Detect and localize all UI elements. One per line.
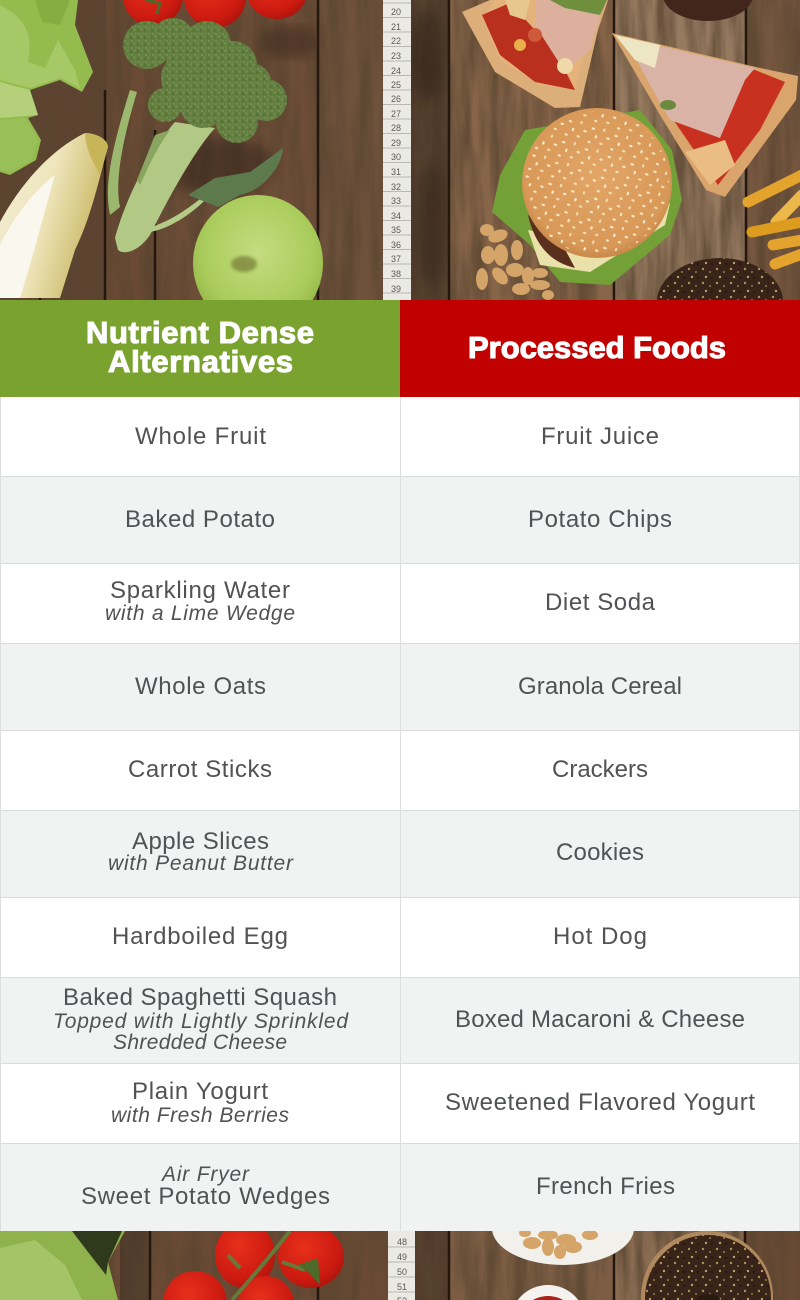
pizza slice, right bbox=[612, 33, 798, 197]
row 9: Plain Yogurt / Sweetened Flavored Yogurt: with Fresh Berries bbox=[111, 1104, 290, 1127]
row 8: Baked Spaghetti Squash / Boxed Macaroni & Cheese: Shredded Cheese bbox=[113, 1031, 287, 1054]
row 1: Whole Fruit / Fruit Juice bbox=[135, 423, 659, 450]
row 7: Hardboiled Egg / Hot Dog: Hot Dog bbox=[553, 923, 647, 950]
row 1: Whole Fruit / Fruit Juice: Fruit Juice bbox=[541, 423, 659, 450]
row 2: Baked Potato / Potato Chips: Potato Chips bbox=[528, 506, 672, 533]
measuring tape, top: 39 bbox=[391, 284, 401, 294]
measuring tape, top: 22 bbox=[391, 36, 401, 46]
row 8: Baked Spaghetti Squash / Boxed Macaroni & Cheese: Boxed Macaroni & Cheese bbox=[455, 1006, 745, 1033]
header: Processed Foods bbox=[400, 300, 800, 397]
measuring tape, bottom: 49 bbox=[397, 1252, 407, 1262]
tomatoes on the vine bbox=[163, 1231, 344, 1300]
row 3: Sparkling Water / Diet Soda: with a Lime Wedge bbox=[105, 602, 295, 625]
row 3: Sparkling Water / Diet Soda: Sparkling Water bbox=[110, 577, 290, 604]
pizza slice, left bbox=[462, 0, 608, 108]
row 6: Apple Slices / Cookies: Apple Slices bbox=[132, 828, 269, 855]
wood planks, bottom bbox=[108, 1231, 800, 1300]
endive bbox=[0, 133, 108, 298]
lettuce bbox=[0, 0, 93, 175]
header: Processed Foods: Processed Foods bbox=[468, 330, 726, 365]
bottom photo: tomatoes, peanuts, donut on wood bbox=[0, 1231, 800, 1300]
tomatoes bbox=[123, 0, 307, 28]
measuring tape, top: 20 bbox=[391, 7, 401, 17]
row 5: Carrot Sticks / Crackers: Crackers bbox=[552, 756, 648, 783]
measuring tape, bottom bbox=[388, 1231, 415, 1300]
row 8: Baked Spaghetti Squash / Boxed Macaroni & Cheese bbox=[53, 984, 745, 1054]
row 2: Baked Potato / Potato Chips bbox=[125, 506, 672, 533]
row 10: Air Fryer Sweet Potato Wedges / French Fries bbox=[81, 1163, 675, 1210]
measuring tape, top: 32 bbox=[391, 182, 401, 192]
measuring tape, top: 33 bbox=[391, 196, 401, 206]
measuring tape, top: 21 bbox=[391, 22, 401, 32]
row 6: Apple Slices / Cookies: with Peanut Butter bbox=[108, 852, 294, 875]
row 6: Apple Slices / Cookies: Cookies bbox=[556, 839, 644, 866]
row 5: Carrot Sticks / Crackers: Carrot Sticks bbox=[128, 756, 272, 783]
measuring tape, top: 25 bbox=[391, 80, 401, 90]
measuring tape, top bbox=[383, 0, 411, 300]
table panel bbox=[0, 300, 800, 1231]
row 2: Baked Potato / Potato Chips: Baked Potato bbox=[125, 506, 275, 533]
row 10: Air Fryer Sweet Potato Wedges / French Fries: French Fries bbox=[536, 1173, 675, 1200]
measuring tape, top: 31 bbox=[391, 167, 401, 177]
row 3: Sparkling Water / Diet Soda: Diet Soda bbox=[545, 589, 656, 616]
row 7: Hardboiled Egg / Hot Dog: Hardboiled Egg bbox=[112, 923, 288, 950]
bowl of peanuts bbox=[492, 1231, 634, 1265]
wood planks background bbox=[0, 0, 800, 300]
row 4: Whole Oats / Granola Cereal: Granola Cereal bbox=[518, 673, 682, 700]
green apple bbox=[193, 195, 323, 300]
row 9: Plain Yogurt / Sweetened Flavored Yogurt bbox=[111, 1078, 755, 1127]
measuring tape, top: 35 bbox=[391, 225, 401, 235]
peanuts bbox=[476, 224, 554, 300]
measuring tape, top: 26 bbox=[391, 94, 401, 104]
row 9: Plain Yogurt / Sweetened Flavored Yogurt: Plain Yogurt bbox=[132, 1078, 268, 1105]
row 4: Whole Oats / Granola Cereal bbox=[135, 673, 682, 700]
ketchup cup bbox=[518, 1285, 578, 1300]
measuring tape, top: 36 bbox=[391, 240, 401, 250]
row 8: Baked Spaghetti Squash / Boxed Macaroni & Cheese: Topped with Lightly Sprinkled bbox=[53, 1010, 349, 1033]
row 8: Baked Spaghetti Squash / Boxed Macaroni & Cheese: Baked Spaghetti Squash bbox=[63, 984, 337, 1011]
chocolate donuts bbox=[657, 0, 783, 300]
header: Nutrient Dense Alternatives: Alternatives bbox=[108, 344, 293, 379]
measuring tape, bottom: 50 bbox=[397, 1267, 407, 1277]
top photo: vegetables and junk food on wood bbox=[0, 0, 800, 300]
hamburger with sesame bun bbox=[492, 108, 682, 285]
row 7: Hardboiled Egg / Hot Dog bbox=[112, 923, 647, 950]
row 10: Air Fryer Sweet Potato Wedges / French Fries: Air Fryer bbox=[160, 1163, 250, 1186]
french fries bbox=[748, 175, 800, 264]
measuring tape, top: 27 bbox=[391, 109, 401, 119]
broccoli bbox=[108, 18, 287, 252]
row 1: Whole Fruit / Fruit Juice: Whole Fruit bbox=[135, 423, 266, 450]
measuring tape, top: 24 bbox=[391, 66, 401, 76]
measuring tape, bottom: 48 bbox=[397, 1237, 407, 1247]
measuring tape, top: 34 bbox=[391, 211, 401, 221]
row 5: Carrot Sticks / Crackers bbox=[128, 756, 648, 783]
measuring tape, top: 30 bbox=[391, 152, 401, 162]
measuring tape, top: 29 bbox=[391, 138, 401, 148]
row 4: Whole Oats / Granola Cereal: Whole Oats bbox=[135, 673, 266, 700]
chocolate donut bbox=[641, 1231, 773, 1300]
measuring tape, top: 28 bbox=[391, 123, 401, 133]
row 9: Plain Yogurt / Sweetened Flavored Yogurt: Sweetened Flavored Yogurt bbox=[445, 1089, 755, 1116]
header: Nutrient Dense Alternatives bbox=[0, 300, 400, 397]
measuring tape, top: 23 bbox=[391, 51, 401, 61]
row 3: Sparkling Water / Diet Soda bbox=[105, 577, 656, 625]
row 10: Air Fryer Sweet Potato Wedges / French Fries: Sweet Potato Wedges bbox=[81, 1183, 330, 1210]
lettuce, bottom bbox=[0, 1231, 125, 1300]
row 6: Apple Slices / Cookies bbox=[108, 828, 644, 875]
header: Nutrient Dense Alternatives: Nutrient Dense bbox=[86, 315, 314, 350]
measuring tape, bottom: 51 bbox=[397, 1282, 407, 1292]
measuring tape, top: 38 bbox=[391, 269, 401, 279]
measuring tape, top: 37 bbox=[391, 254, 401, 264]
